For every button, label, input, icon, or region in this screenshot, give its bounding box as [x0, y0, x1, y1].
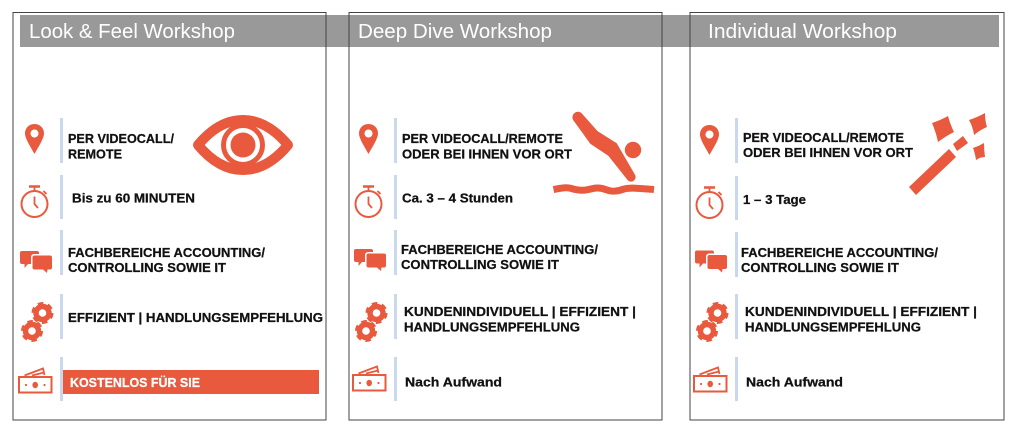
row: departments: CONTROLLING SOWIE IT	[741, 261, 899, 275]
icon: diver	[554, 113, 654, 191]
row: benefits: KUNDENINDIVIDUELL | EFFIZIENT |	[745, 305, 977, 319]
row: departments: CONTROLLING SOWIE IT	[401, 258, 559, 272]
panel: Individual Workshop	[690, 12, 1004, 420]
row: price: KOSTENLOS FÜR SIE	[70, 375, 200, 390]
row: departments	[695, 232, 939, 277]
row: departments: CONTROLLING SOWIE IT	[68, 261, 226, 275]
row: location: REMOTE	[68, 148, 122, 162]
row: price: Nach Aufwand	[405, 376, 502, 390]
row: benefits: HANDLUNGSEMPFEHLUNG	[745, 320, 921, 334]
heading: Look & Feel Workshop	[29, 21, 235, 43]
row: location: ODER BEI IHNEN VOR ORT	[402, 148, 572, 162]
row: location: PER VIDEOCALL/REMOTE	[402, 132, 563, 146]
row: duration: Bis zu 60 MINUTEN	[72, 192, 195, 206]
row: departments	[354, 230, 599, 275]
icon: eye	[198, 120, 288, 170]
row: duration	[696, 176, 806, 220]
row: benefits: HANDLUNGSEMPFEHLUNG	[404, 320, 580, 334]
row: location	[700, 118, 913, 163]
row: departments: FACHBEREICHE ACCOUNTING/	[401, 243, 599, 257]
row: benefits: EFFIZIENT | HANDLUNGSEMPFEHLUNG	[68, 311, 323, 325]
row: location	[359, 118, 572, 163]
row: benefits	[356, 294, 636, 340]
row: duration	[356, 175, 513, 219]
row: location: PER VIDEOCALL/	[68, 132, 175, 146]
panel: Deep Dive Workshop	[349, 12, 662, 420]
header band	[20, 15, 999, 47]
row: departments: FACHBEREICHE ACCOUNTING/	[741, 246, 939, 260]
row: price	[353, 357, 502, 401]
row: price	[694, 357, 843, 401]
heading: Deep Dive Workshop	[358, 21, 552, 43]
row: duration: Ca. 3 – 4 Stunden	[402, 192, 513, 206]
row: departments	[20, 230, 266, 275]
row: price	[19, 357, 319, 401]
row: location: ODER BEI IHNEN VOR ORT	[743, 146, 913, 160]
row: duration	[22, 175, 195, 219]
row: departments: FACHBEREICHE ACCOUNTING/	[68, 246, 266, 260]
icon: magic wand	[909, 113, 987, 195]
row: benefits	[698, 294, 977, 340]
row: location	[25, 118, 175, 163]
row: duration: 1 – 3 Tage	[743, 193, 806, 207]
row: price: Nach Aufwand	[746, 376, 843, 390]
row: benefits	[22, 294, 323, 340]
panel: Look & Feel Workshop	[13, 12, 326, 420]
heading: Individual Workshop	[708, 21, 897, 43]
row: location: PER VIDEOCALL/REMOTE	[743, 131, 904, 145]
row: benefits: KUNDENINDIVIDUELL | EFFIZIENT |	[404, 305, 636, 319]
